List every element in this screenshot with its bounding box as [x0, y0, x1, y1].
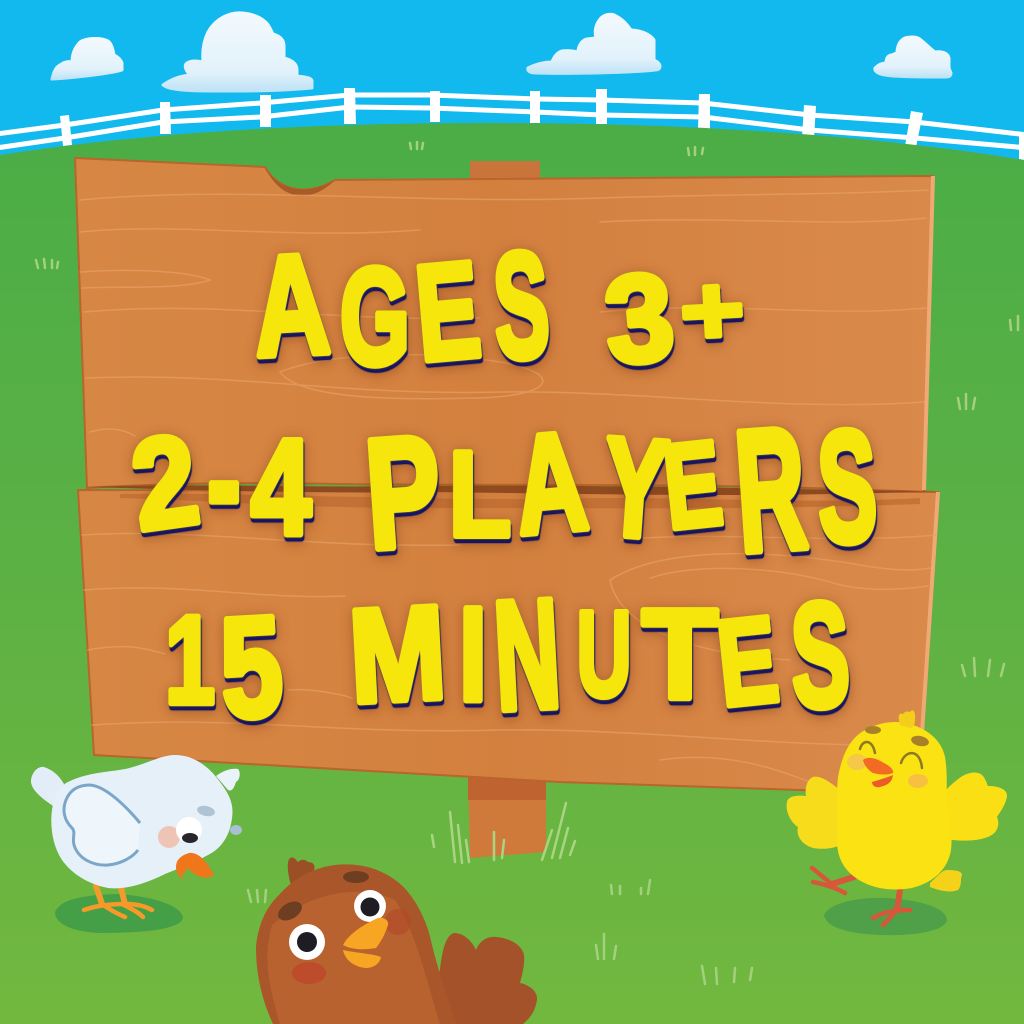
sign text: 2-4 Players: L	[449, 425, 511, 562]
lower board light edge	[918, 492, 938, 794]
chick body	[837, 722, 952, 890]
chick legs	[832, 877, 900, 910]
sign text: 15 Minutes: S	[788, 571, 852, 739]
yellow chick	[787, 710, 1007, 935]
sign text: 2-4 Players: R	[730, 392, 812, 588]
sign text: 15 Minutes: M	[346, 578, 449, 731]
sign text: Ages 3+: S	[490, 220, 553, 391]
notch shading	[265, 167, 335, 196]
hen legs	[96, 886, 125, 904]
crack streak	[120, 494, 920, 508]
sign text: 2-4 Players	[123, 392, 880, 588]
wood grain	[80, 190, 936, 790]
sign text: 15 Minutes: N	[490, 566, 564, 743]
sign text: Ages 3+	[250, 220, 747, 394]
sign text: 15 Minutes: E	[711, 590, 784, 732]
sign text: Ages 3+: E	[410, 232, 486, 390]
hen eyes	[289, 924, 325, 960]
hen shadow	[55, 894, 183, 933]
sign text: Ages 3+: A	[250, 224, 333, 387]
hen wing	[437, 933, 537, 1024]
sign text: Ages 3+: G	[340, 240, 410, 394]
hen tuft	[288, 857, 315, 892]
sky	[0, 0, 1024, 170]
sign text: 2-4 Players: P	[361, 403, 446, 582]
sign text: 2-4 Players: 4	[251, 412, 311, 564]
clouds	[52, 13, 951, 91]
sign text: 15 Minutes: 5	[217, 586, 286, 748]
sign text: 15 Minutes: U	[577, 586, 631, 722]
grass tufts	[36, 142, 1018, 984]
sign text: 2-4 Players: S	[815, 398, 880, 577]
chick shadow	[824, 898, 947, 935]
chick head tuft	[899, 710, 915, 728]
hen belly	[267, 892, 440, 1024]
chick face	[865, 726, 881, 734]
sign text: 2-4 Players: 2	[123, 407, 206, 558]
hen beak	[343, 918, 388, 949]
sign text: 15 Minutes	[165, 566, 852, 748]
chick wings and tail	[787, 777, 840, 849]
hen wing	[64, 785, 140, 865]
board gap crack	[85, 485, 936, 495]
hen brows	[275, 898, 305, 924]
brown hen	[256, 857, 537, 1024]
sign text: Ages 3+: +	[677, 255, 747, 367]
hen tail	[31, 767, 64, 808]
sign text: 2-4 Players: E	[658, 416, 728, 555]
sign text: 2-4 Players: Y	[598, 409, 672, 569]
upper board light edge	[924, 176, 933, 490]
chick beak	[863, 758, 893, 774]
white hen	[31, 755, 242, 933]
grass around post	[432, 803, 575, 863]
hen cheeks	[292, 962, 326, 984]
upper board	[75, 158, 933, 492]
signpost top	[470, 161, 540, 191]
sign text: Ages 3+: 3	[600, 248, 679, 391]
sign text: 15 Minutes: I	[459, 579, 487, 728]
sign text: 15 Minutes: T	[642, 583, 718, 725]
hen spare feather	[230, 825, 242, 835]
sign text: 15 Minutes: 1	[165, 591, 215, 731]
signpost bottom	[468, 770, 546, 858]
hen body	[51, 755, 232, 888]
hen body	[256, 864, 456, 1024]
fence	[0, 88, 1024, 160]
hen beak	[176, 853, 214, 881]
sign text: 2-4 Players: A	[509, 402, 593, 564]
sign text: 2-4 Players: -	[207, 400, 241, 561]
wooden sign	[75, 158, 938, 794]
lower board	[78, 490, 938, 794]
hen cheek and eye	[158, 826, 180, 848]
